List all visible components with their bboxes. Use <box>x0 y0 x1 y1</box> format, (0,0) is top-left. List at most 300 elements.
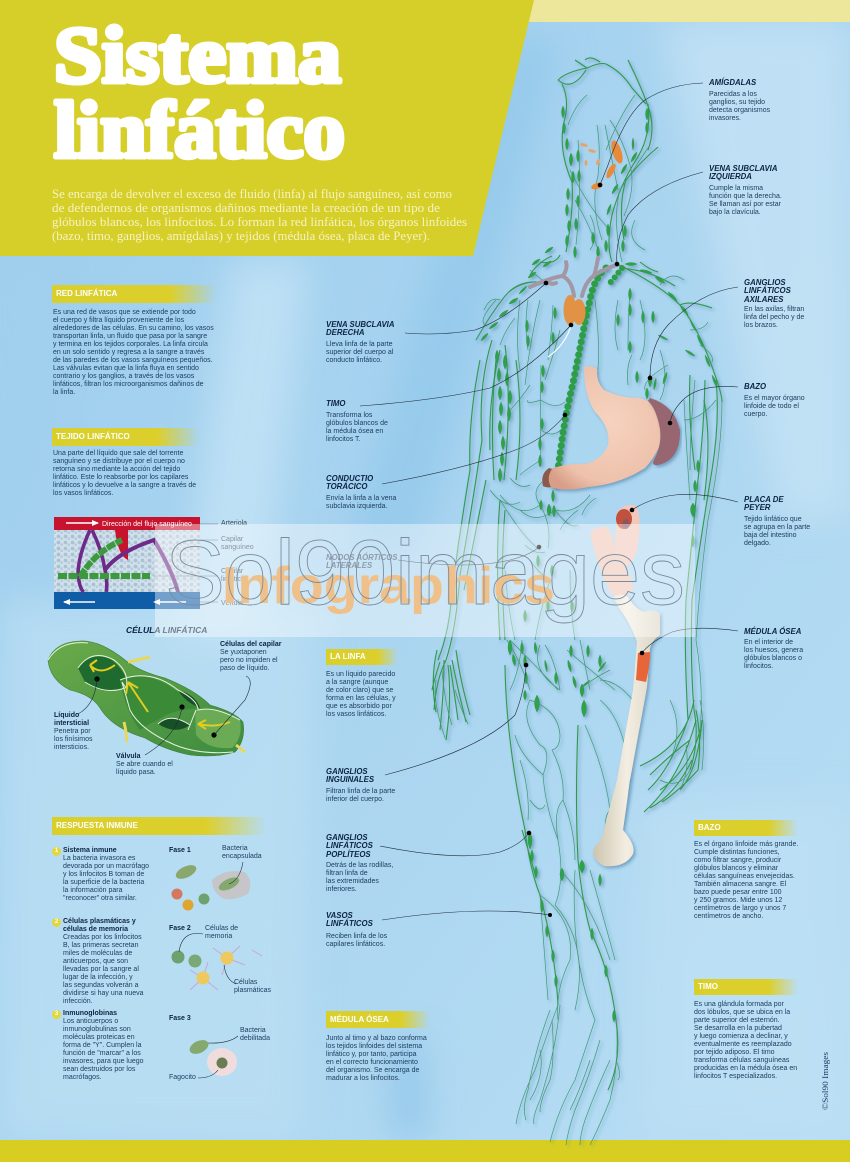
lymphatic network <box>432 58 722 1145</box>
label heading: POPLÍTEOS <box>326 850 371 859</box>
text: retorna sino mediante la acción del tejido <box>53 466 180 473</box>
label text <box>220 649 278 672</box>
section: timo <box>694 979 804 1082</box>
heading: BAZO <box>698 823 721 832</box>
bacteria encapsulada: encapsulada <box>222 853 262 860</box>
text: a la sangre (aunque <box>326 679 388 686</box>
step text: sean destruidos por los <box>63 1066 135 1073</box>
arms and shoulders <box>432 247 722 812</box>
label: amígdalas <box>709 79 784 124</box>
text: transportan linfa, un fluido que pasa por la sangre <box>53 333 207 340</box>
text: forma en las células, y <box>326 695 396 702</box>
label text: las extremidades <box>326 878 379 885</box>
label text: líquido pasa. <box>116 769 156 776</box>
step text: macrófagos. <box>63 1074 102 1081</box>
text: Es un líquido parecido <box>326 671 395 678</box>
step badge <box>52 918 61 927</box>
diagram labels: Vénula <box>221 600 243 607</box>
label: ganglios poplíteos <box>326 834 411 895</box>
text: Es el órgano linfoide más grande. <box>694 841 798 848</box>
step text: función de "marcar" a los <box>63 1050 141 1057</box>
subclavian veins <box>530 258 617 296</box>
label text: En las axilas, filtran <box>744 306 804 313</box>
watermark: Infographics <box>222 557 555 615</box>
label heading: TIMO <box>326 399 346 408</box>
step text: invasores, para que luego <box>63 1058 144 1065</box>
text: eventualmente es reemplazado <box>694 1041 792 1048</box>
label heading: DERECHA <box>326 328 365 337</box>
step heading: Inmunoglobinas <box>63 1010 117 1017</box>
step badge <box>52 847 61 856</box>
text: sanguíneo y se distribuye por el cuerpo no <box>53 458 185 465</box>
label text: Lleva linfa de la parte <box>326 341 393 348</box>
step text <box>63 1018 144 1081</box>
label text: la médula ósea en <box>326 428 383 435</box>
bone marrow leader <box>642 628 738 653</box>
text: linfático. Este lo reabsorbe por los capilares <box>53 474 188 481</box>
text: el cuerpo y filtra líquido proveniente de los <box>53 317 184 324</box>
label: ganglios inguinales <box>326 767 395 803</box>
fase 1: Fase 1 <box>169 847 191 854</box>
label text: intersticios. <box>54 744 89 751</box>
heading <box>694 820 798 836</box>
label heading <box>326 474 374 491</box>
label: vasos linfáticos <box>326 912 411 950</box>
watermark: Sol90images <box>165 522 685 624</box>
text: los tejidos linfoides del sistema <box>326 1043 422 1050</box>
label text: glóbulos blancos de <box>326 420 388 427</box>
label text: conducto linfático. <box>326 357 382 364</box>
heading: LA LINFA <box>330 652 366 661</box>
label text: filtran linfa de <box>326 870 368 877</box>
intro text <box>52 187 467 243</box>
torso <box>490 288 708 640</box>
text: linfocitos T especializados. <box>694 1073 777 1080</box>
text: por tejido adiposo. El timo <box>694 1049 775 1056</box>
title: Sistema <box>54 12 341 100</box>
label heading <box>326 320 394 337</box>
text: Es una glándula formada por <box>694 1001 784 1008</box>
leader dots <box>524 183 672 917</box>
label heading <box>54 712 89 727</box>
label text: Filtran linfa de la parte <box>326 788 395 795</box>
text <box>326 670 396 718</box>
label text: superior del cuerpo al <box>326 349 393 356</box>
step 3 <box>52 1010 144 1081</box>
step heading: Células plasmáticas y <box>63 918 136 925</box>
fase 2: Fase 2 <box>169 925 191 932</box>
label heading <box>709 165 777 182</box>
text: células sanguíneas envejecidas. <box>694 873 795 880</box>
label text: subclavia izquierda. <box>326 503 387 510</box>
thymus <box>564 295 586 325</box>
label: placa de peyer <box>744 496 814 549</box>
text: parte superior del esternón. <box>694 1017 780 1024</box>
text: glóbulos blancos y eliminar <box>694 865 778 872</box>
label text <box>709 185 782 217</box>
fagocito: Fagocito <box>169 1074 196 1081</box>
text: los vasos linfáticos. <box>53 490 113 497</box>
label text <box>326 862 393 894</box>
text: en el correcto funcionamiento <box>326 1059 418 1066</box>
step text: y los linfocitos B toman de <box>63 871 144 878</box>
label text <box>744 639 803 671</box>
thoracic duct <box>555 268 606 490</box>
label text <box>744 516 810 548</box>
células plasmáticas <box>234 978 271 994</box>
label text: En el interior de <box>744 639 793 646</box>
label text <box>326 412 388 443</box>
heading: MÉDULA ÓSEA <box>330 1015 389 1024</box>
step text: moléculas proteicas en <box>63 1034 135 1041</box>
label heading: BAZO <box>744 382 766 391</box>
label text: delgado. <box>744 540 771 547</box>
label heading: LINFÁTICOS <box>744 286 791 295</box>
label text: Envía la linfa a la vena <box>326 495 396 502</box>
inguinal leader <box>385 665 526 775</box>
text: Se desarrolla en la pubertad <box>694 1025 782 1032</box>
label heading: AXILARES <box>744 295 783 304</box>
heading <box>694 979 798 995</box>
label heading: Válvula <box>116 753 141 760</box>
label text: linfoide de todo el <box>744 403 799 410</box>
label heading: VASOS <box>326 911 353 920</box>
popliteal leader <box>380 833 529 856</box>
text: que es absorbido por <box>326 703 392 710</box>
label text: Se abre cuando el <box>116 761 173 768</box>
label: vena subclavia derecha <box>326 320 394 364</box>
step heading: Sistema inmune <box>63 847 117 854</box>
step text: miles de moléculas de <box>63 950 132 957</box>
lymph capillary cell <box>48 640 251 756</box>
left subclavian leader <box>617 172 703 264</box>
intro text: Se encarga de devolver el exceso de fluido (linfa) al flujo sanguíneo, así como <box>52 187 452 201</box>
text: del organismo. Se encarga de <box>326 1067 419 1074</box>
step text <box>63 854 149 902</box>
label text <box>54 728 93 751</box>
title <box>54 12 345 175</box>
aortic nodes leader <box>398 547 539 565</box>
text: Es una red de vasos que se extiende por todo <box>53 309 196 316</box>
text: dos lóbulos, que se ubica en la <box>694 1009 790 1016</box>
text: También almacena sangre. El <box>694 881 786 888</box>
label text: Transforma los <box>326 412 372 419</box>
step text: inmunoglobulinas son <box>63 1026 131 1033</box>
step text: forma de "Y". Cumplen la <box>63 1042 142 1049</box>
label: nodos aórticos <box>326 552 398 570</box>
femur <box>593 594 660 866</box>
text: de las paredes de los vasos sanguíneos pequeños. <box>53 357 213 364</box>
bacteria encapsulada <box>222 844 262 860</box>
step badge: 1 <box>55 848 58 854</box>
label heading: PEYER <box>744 503 770 512</box>
label text <box>744 306 804 330</box>
axillary leader <box>650 287 738 378</box>
text: en un solo sentido y regresa a la sangre a través <box>53 349 204 356</box>
text: contrario y los ganglios, a través de los vasos <box>53 373 194 380</box>
text <box>53 308 214 396</box>
Peyer leader <box>632 494 738 510</box>
heading <box>52 428 199 446</box>
label text: inferior del cuerpo. <box>326 796 384 803</box>
thymus leader <box>360 325 571 406</box>
label text: paso de líquido. <box>220 665 269 672</box>
step text: La bacteria invasora es <box>63 855 135 862</box>
spleen leader <box>670 386 738 423</box>
label text: Se llaman así por estar <box>709 201 781 208</box>
section: red linfática <box>52 285 214 396</box>
diagram labels: Arteriola <box>221 520 247 527</box>
intro text: glóbulos blancos, los linfocitos. Lo forman la red linfática, los órganos linfoides <box>52 215 467 229</box>
stomach end <box>542 468 552 487</box>
label text: cuerpo. <box>744 411 767 418</box>
label heading: VENA SUBCLAVIA <box>709 164 777 173</box>
label text <box>326 933 387 949</box>
step badge: 2 <box>55 919 58 925</box>
label heading: VENA SUBCLAVIA <box>326 320 394 329</box>
tissue diagram <box>54 517 218 609</box>
label text: bajo la clavícula. <box>709 209 761 216</box>
thoracic duct leader <box>382 415 565 484</box>
células de memoria: Células de <box>205 925 238 932</box>
label heading: TORÁCICO <box>326 482 367 491</box>
text: y luego comienza a declinar, y <box>694 1033 788 1040</box>
label text: los brazos. <box>744 322 778 329</box>
label: vena subclavia izquierda <box>709 165 789 218</box>
text: y termina en los tejidos corporales. La linfa circula <box>53 341 208 348</box>
heading <box>52 285 216 303</box>
label text: Penetra por <box>54 728 91 735</box>
bone marrow <box>636 652 650 682</box>
lymph vessel leader <box>382 911 550 920</box>
label heading: Líquido <box>54 712 79 719</box>
label heading: GANGLIOS <box>744 278 786 287</box>
label heading: Células del capilar <box>220 641 281 648</box>
label text <box>709 91 770 123</box>
stomach <box>545 366 663 490</box>
heading <box>326 649 398 665</box>
heading <box>326 1011 430 1028</box>
heading <box>52 817 266 835</box>
label text: linfa del pecho y de <box>744 314 804 321</box>
label text: Reciben linfa de los <box>326 933 387 940</box>
label text <box>326 494 396 510</box>
label text: capilares linfáticos. <box>326 941 385 948</box>
label: timo <box>326 399 388 443</box>
label: conducto torácico <box>326 474 396 510</box>
label text: detecta organismos <box>709 107 770 114</box>
section: tejido linfático <box>52 428 198 497</box>
label: ganglios axilares <box>744 279 814 332</box>
title: linfático <box>54 87 345 175</box>
amygdala leader <box>600 83 703 185</box>
step badge <box>52 1010 61 1019</box>
bacteria encapsulada: Bacteria <box>222 845 248 852</box>
label text <box>744 395 805 419</box>
right leg <box>550 700 630 1145</box>
phase 2 cells <box>172 933 262 990</box>
bacteria debilitada <box>240 1026 270 1042</box>
label text: Tejido linfático que <box>744 516 802 523</box>
text: los vasos linfáticos. <box>326 711 386 718</box>
diagram labels: linfático <box>221 576 245 583</box>
células plasmáticas: Células <box>234 979 257 986</box>
label text: linfocitos T. <box>326 436 360 443</box>
label heading <box>326 912 373 929</box>
section: respuesta inmune <box>52 817 264 1081</box>
label text: inferiores. <box>326 886 357 893</box>
Peyer patch intestine <box>590 505 640 597</box>
label heading: MÉDULA ÓSEA <box>744 627 801 636</box>
phase labels <box>169 844 271 1081</box>
step text: anticuerpos, que son <box>63 958 128 965</box>
text <box>694 1001 797 1081</box>
amygdalas <box>580 139 625 191</box>
head vessels <box>558 58 658 262</box>
text: de color claro) que se <box>326 687 393 694</box>
fase 3: Fase 3 <box>169 1015 191 1022</box>
label heading: LINFÁTICOS <box>326 919 373 928</box>
label text: Cumple la misma <box>709 185 763 192</box>
left leg <box>505 665 580 1124</box>
label: nodos aórticos: LATERALES <box>326 561 372 570</box>
label: bazo <box>744 383 814 420</box>
label: células del capilar <box>220 640 282 672</box>
células plasmáticas: plasmáticas <box>234 987 271 994</box>
label text: invasores. <box>709 115 741 122</box>
spleen <box>648 398 680 465</box>
label text: Es el mayor órgano <box>744 395 805 402</box>
text: linfáticos y lo devuelve a la sangre a través de <box>53 482 196 489</box>
step 1 <box>52 846 149 902</box>
label text: linfocitos. <box>744 663 773 670</box>
section: bazo <box>694 820 804 922</box>
células de memoria: memoria <box>205 933 232 940</box>
step text: lugar de la infección, y <box>63 974 133 981</box>
text: madurar a los linfocitos. <box>326 1075 400 1082</box>
step text: las segundas volverán a <box>63 982 138 989</box>
phase 3 cells <box>187 1036 238 1078</box>
right subclavian leader <box>405 283 546 334</box>
label heading <box>744 496 784 513</box>
label heading <box>326 768 374 785</box>
text: transforma células sanguíneas <box>694 1057 789 1064</box>
label text <box>116 760 173 776</box>
label heading <box>744 279 791 304</box>
step text: Los anticuerpos o <box>63 1018 118 1025</box>
label heading: INGUINALES <box>326 775 374 784</box>
text <box>53 450 196 497</box>
text: como filtrar sangre, producir <box>694 857 781 864</box>
heading: RESPUESTA INMUNE <box>56 821 138 830</box>
bottom strip <box>0 1140 850 1162</box>
pelvis <box>507 640 640 717</box>
text <box>694 841 798 921</box>
step text: la superficie de la bacteria <box>63 879 144 886</box>
label heading: PLACA DE <box>744 495 784 504</box>
credit: ©Sol90 Images <box>821 1052 830 1110</box>
step text: B, las primeras secretan <box>63 942 138 949</box>
heading: TEJIDO LINFÁTICO <box>56 432 130 441</box>
bacteria debilitada: debilitada <box>240 1035 270 1042</box>
step text: la información para <box>63 887 123 894</box>
diagram labels: Capilar <box>221 568 243 575</box>
text: linfático y, por tanto, participa <box>326 1051 417 1058</box>
label text <box>326 788 395 804</box>
step heading <box>63 918 136 933</box>
step text: llevadas por la sangre al <box>63 966 139 973</box>
text: y 250 gramos. Mide unos 12 <box>694 897 782 904</box>
label heading: IZQUIERDA <box>709 172 752 181</box>
diagram labels: sanguíneo <box>221 544 254 551</box>
step badge: 3 <box>55 1011 58 1017</box>
text: centímetros de largo y unos 7 <box>694 905 786 912</box>
label heading: intersticial <box>54 720 89 727</box>
label text: ganglios, su tejido <box>709 99 765 106</box>
text: producidas en la médula ósea en <box>694 1065 797 1072</box>
tissue diagram: Dirección del flujo sanguíneo <box>102 521 192 528</box>
label text: los huesos, genera <box>744 647 803 654</box>
immune phases illustration <box>172 862 262 1078</box>
label heading: GANGLIOS <box>326 767 368 776</box>
label heading: CONDUCTIO <box>326 474 373 483</box>
intro text: de defendernos de organismos dañinos mediante la creación de un tipo de <box>52 201 440 215</box>
label text: Se yuxtaponen <box>220 649 267 656</box>
step text <box>63 934 144 1005</box>
label heading: GANGLIOS <box>326 833 368 842</box>
step text: "reconocer" otra similar. <box>63 895 137 902</box>
label heading: LINFÁTICOS <box>326 841 373 850</box>
conducto curve <box>548 326 571 357</box>
label text: Parecidas a los <box>709 91 757 98</box>
label: médula ósea <box>744 628 814 673</box>
label: válvula <box>116 752 173 776</box>
bacteria debilitada: Bacteria <box>240 1027 266 1034</box>
text: Junto al timo y al bazo conforma <box>326 1035 427 1042</box>
label: líquido intersticial <box>54 712 93 751</box>
heading: RED LINFÁTICA <box>56 289 117 298</box>
diagram labels: Capilar <box>221 536 243 543</box>
text: Las válvulas evitan que la linfa fluya en sentido <box>53 365 199 372</box>
text: linfáticos, filtran los microorganismos dañinos de <box>53 381 204 388</box>
label text: glóbulos blancos o <box>744 655 802 662</box>
label heading <box>326 834 373 859</box>
step text: dividirse si hay una nueva <box>63 990 144 997</box>
step 2 <box>52 918 144 1005</box>
label text <box>326 340 393 364</box>
text: centímetros de ancho. <box>694 913 763 920</box>
intro text: (bazo, timo, ganglios, amígdalas) y tejidos (médula ósea, placa de Peyer). <box>52 229 430 243</box>
text: bazo puede pesar entre 100 <box>694 889 782 896</box>
label text: se agrupa en la parte <box>744 524 810 531</box>
step text: devorada por un macrófago <box>63 863 149 870</box>
label text: pero no impiden el <box>220 657 278 664</box>
células de memoria <box>205 924 238 940</box>
text: alrededores de las células. En su camino, los vasos <box>53 325 214 332</box>
section: médula ósea <box>326 1011 432 1084</box>
phase 1 cells <box>172 862 250 910</box>
text <box>326 1035 427 1083</box>
text: la linfa. <box>53 389 75 396</box>
heading: TIMO <box>698 982 718 991</box>
step heading: células de memoria <box>63 926 128 933</box>
label heading: AMÍGDALAS <box>709 78 756 87</box>
section: la linfa <box>326 649 397 718</box>
text: Cumple distintas funciones, <box>694 849 780 856</box>
label text: Detrás de las rodillas, <box>326 862 393 869</box>
step text: infección. <box>63 998 93 1005</box>
label text: función que la derecha. <box>709 193 782 200</box>
